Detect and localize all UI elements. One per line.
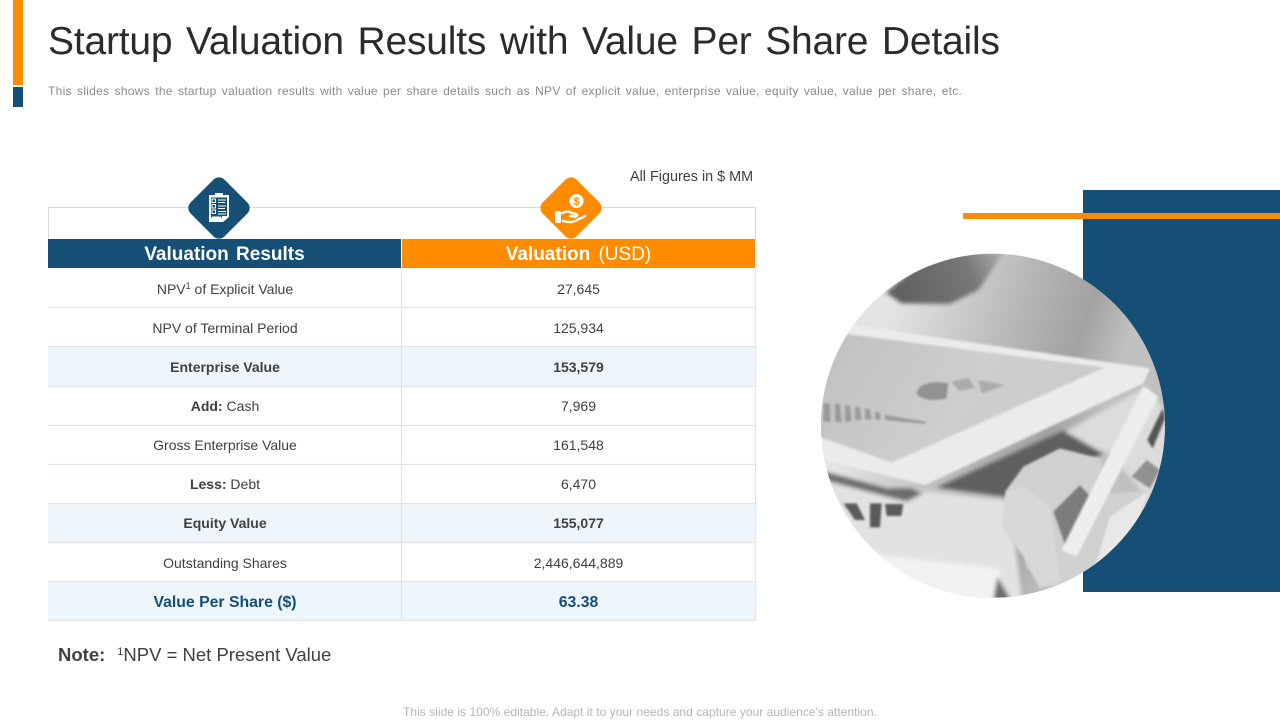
chart on paper (843, 503, 903, 527)
note: Note: 1NPV = Net Present Value (58, 644, 331, 665)
screen bars (823, 403, 927, 424)
row 1 value: 27,645 (557, 281, 600, 297)
row 2 value: 125,934 (553, 320, 604, 336)
row 6 value: 6,470 (561, 476, 596, 492)
row 4 value: 7,969 (561, 398, 596, 414)
highlighted row: value per share (48, 582, 755, 620)
icon: clipboard (188, 177, 250, 239)
row 3 value: 153,579 (553, 359, 604, 375)
row 7 value: 155,077 (553, 515, 604, 531)
row 6 label: Less: Debt (190, 476, 260, 492)
units note: All Figures in $ MM (630, 169, 753, 185)
paper (810, 480, 1023, 610)
row 3 label: Enterprise Value (170, 359, 280, 375)
row 2 label: NPV of Terminal Period (152, 320, 298, 336)
screen pie chart (917, 382, 948, 400)
shadow under tablet (937, 431, 1103, 497)
table header: valuation usd: Valuation (USD) (506, 244, 651, 265)
highlighted row: enterprise value (48, 347, 755, 386)
accent bar: blue (13, 87, 23, 107)
title: Startup Valuation Results with Value Per Share Details (48, 20, 1000, 63)
footer: This slide is 100% editable. Adapt it to your needs and capture your audience's attention. (403, 705, 877, 719)
table header: valuation usd (402, 239, 755, 268)
table top frame (48, 207, 756, 240)
background behind lower tablet (1057, 387, 1167, 507)
accent line: orange (963, 213, 1280, 219)
row 5 value: 161,548 (553, 437, 604, 453)
hand (1005, 448, 1153, 587)
stylus (1062, 387, 1158, 557)
row 9 value: 63.38 (559, 594, 598, 611)
top hand (886, 250, 1003, 304)
row 8 value: 2,446,644,889 (534, 555, 623, 571)
icon: hand with coin (540, 177, 602, 239)
accent bar: orange (13, 0, 23, 85)
table header: valuation results: Valuation Results (144, 244, 305, 265)
row 7 label: Equity Value (183, 515, 267, 531)
decorative panel: blue (1083, 190, 1280, 592)
row 4 label: Add: Cash (191, 398, 259, 414)
highlighted row: equity value (48, 504, 755, 542)
tablet body (818, 325, 1150, 485)
icon: hand with coin: $ (573, 196, 580, 208)
subtitle: This slides shows the startup valuation results with value per share details such as NPV of explicit value, enterprise value, equity value, value per share, etc. (48, 84, 962, 98)
row 8 label: Outstanding Shares (163, 555, 287, 571)
row 1 label: NPV1 of Explicit Value (157, 281, 293, 297)
table header: valuation results (48, 239, 401, 268)
row 9 label: Value Per Share ($) (153, 594, 297, 611)
tablet screen (818, 334, 1105, 463)
photo: hands using tablet (821, 254, 1165, 598)
row 5 label: Gross Enterprise Value (153, 437, 297, 453)
